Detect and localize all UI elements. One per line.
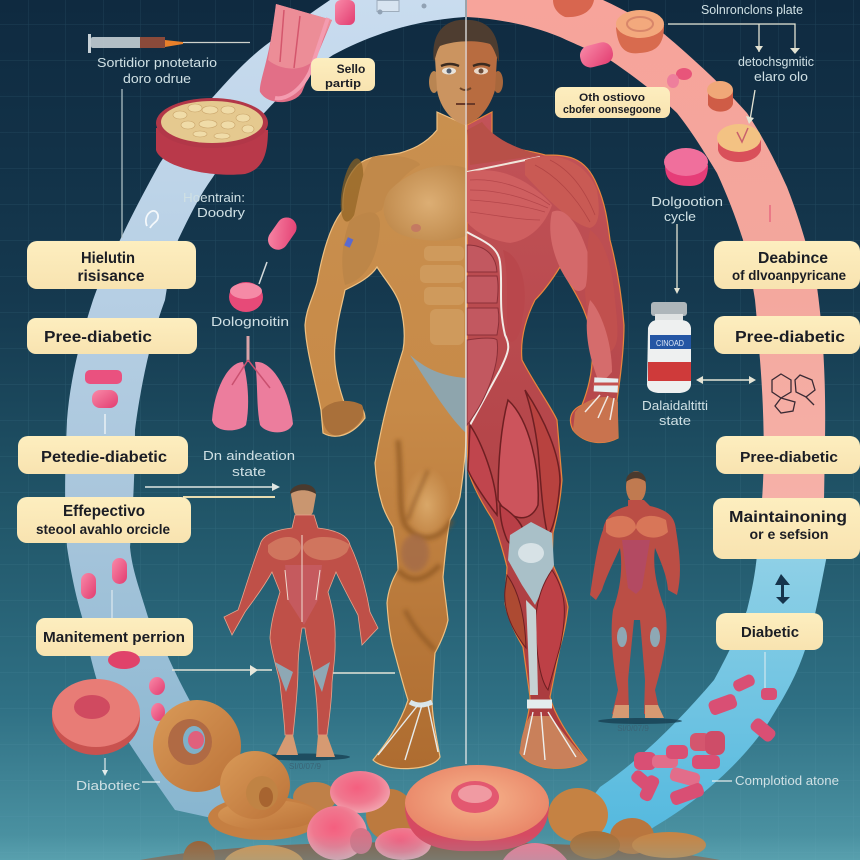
thigh muscles bbox=[468, 390, 560, 547]
text: dish caption bbox=[183, 191, 246, 220]
icon: pink tablet bbox=[229, 282, 263, 312]
label: Oth ostiovo bbox=[555, 87, 670, 118]
text: small figure captions: Sl/0/07/9 bbox=[617, 724, 649, 733]
text: syringe caption: doro odrue bbox=[123, 72, 191, 86]
icon: pink pills lower left bbox=[108, 651, 165, 721]
label: Pre-diabetic right 2 bbox=[716, 436, 860, 474]
hair bbox=[290, 484, 316, 494]
text: Complotiod atone: Complotiod atone bbox=[735, 773, 839, 788]
label: Effepectivo: steool avahlo orcicle bbox=[36, 521, 170, 537]
icon: left donut bbox=[52, 679, 140, 755]
knees bbox=[617, 627, 627, 647]
arrowheads top right bbox=[674, 46, 800, 294]
face right bbox=[465, 20, 497, 125]
biceps bbox=[342, 212, 380, 285]
label: Maintainoning: or e sefsion bbox=[750, 526, 828, 542]
text and arrow: Diabotice: Diabotiec bbox=[76, 778, 141, 793]
foot straps bbox=[410, 702, 432, 705]
ears bbox=[429, 71, 439, 93]
arrow: sky double arrow bbox=[775, 574, 790, 604]
icon: small curl on band bbox=[146, 211, 158, 228]
icon: lungs bbox=[212, 336, 293, 432]
label: Manitement perrion bbox=[36, 618, 193, 656]
label: Deabince: of dlvoanpyricane bbox=[732, 267, 846, 283]
obliques bbox=[503, 250, 525, 342]
text: top right captions bbox=[651, 3, 814, 224]
label: Maintainoning: Maintainoning bbox=[729, 509, 847, 526]
pectoral bbox=[467, 170, 552, 243]
body bbox=[590, 500, 680, 714]
divider: center line bbox=[465, 0, 467, 764]
label: Oth ostiovo: cbofer oonsegoone bbox=[563, 104, 661, 116]
neck muscles bbox=[467, 122, 542, 165]
icon: vial bbox=[647, 302, 691, 393]
labels: left column bbox=[17, 58, 375, 656]
label: Petedie-diabetic bbox=[18, 436, 188, 474]
head bbox=[429, 20, 503, 125]
hair bbox=[433, 20, 499, 62]
label: Oth ostiovo: Oth ostiovo bbox=[579, 92, 645, 104]
chest bbox=[606, 516, 668, 538]
abs bbox=[285, 565, 322, 625]
label: Effepectivo: Effepectivo bbox=[63, 503, 145, 520]
knees bbox=[275, 662, 330, 692]
tendon bbox=[526, 600, 538, 695]
hair bbox=[626, 472, 646, 482]
icon: vial: CINOAD bbox=[656, 339, 684, 348]
pectorals bbox=[268, 537, 350, 560]
eyes bbox=[442, 68, 456, 74]
text: syringe caption: Sortidior pnotetario bbox=[97, 56, 217, 70]
icon: pink capsule bbox=[264, 214, 301, 254]
head bbox=[626, 471, 646, 503]
triceps and forearm bbox=[585, 230, 617, 352]
brown ring 2 bbox=[208, 796, 320, 840]
icon: pink capsules on band bbox=[81, 558, 127, 618]
text: pill caption: Dolognoitin bbox=[211, 315, 289, 329]
knee bbox=[508, 522, 554, 605]
ankle wrap and foot bbox=[527, 700, 552, 708]
thigh and knee shading bbox=[398, 440, 452, 650]
head bbox=[291, 487, 316, 518]
labels: right column bbox=[555, 87, 860, 650]
central donut bbox=[405, 805, 549, 851]
label: Sello bbox=[311, 58, 375, 91]
icon: syringe bbox=[88, 34, 250, 53]
body: skin half bbox=[305, 112, 466, 769]
label: Effepectivo bbox=[17, 497, 191, 543]
brown blobs behind bbox=[293, 782, 337, 812]
text: top right captions: Dolgootion bbox=[651, 195, 723, 209]
pink arc right bbox=[467, 0, 825, 500]
arrow: thin line on sky band bbox=[764, 652, 766, 700]
text and arrow: Diabotice bbox=[76, 758, 160, 793]
body: muscle half bbox=[467, 112, 624, 768]
deltoid bbox=[525, 156, 599, 228]
label: Pre-diabetic left bbox=[27, 318, 197, 354]
icon: blurry grey marks on arc bbox=[377, 0, 426, 14]
panel: small figure left bbox=[224, 484, 378, 760]
label: Deabince bbox=[714, 241, 860, 289]
label: Pre-diabetic right 1 bbox=[714, 316, 860, 354]
text: lungs caption: state bbox=[232, 465, 266, 479]
panel: central figure, skin half bbox=[305, 112, 466, 769]
panel: central figure, muscle half bbox=[467, 112, 624, 768]
abs bbox=[622, 540, 650, 594]
deltoid bbox=[352, 155, 420, 225]
label: Petedie-diabetic: Petedie-diabetic bbox=[41, 449, 167, 466]
label: Pre-diabetic right 2: Pree-diabetic bbox=[740, 449, 838, 466]
face left bbox=[435, 20, 465, 125]
panel: small figure right bbox=[590, 471, 682, 724]
arrow: top right connectors bbox=[668, 24, 795, 290]
pectoral bbox=[384, 165, 466, 241]
label: Diabetic bbox=[716, 613, 823, 650]
biceps bbox=[550, 211, 590, 291]
abs bbox=[420, 246, 464, 345]
arrow: pill arrow bbox=[259, 262, 267, 284]
white fascia bbox=[467, 232, 508, 425]
text: vial caption bbox=[642, 399, 708, 428]
label: Hielutin: risisance bbox=[78, 268, 145, 285]
deltoid hair texture bbox=[337, 157, 367, 223]
arrow: horizontal lower left bbox=[172, 665, 395, 676]
icon: pink pills pair bbox=[85, 370, 122, 408]
icon: molecule bbox=[772, 374, 815, 413]
pink balls bbox=[330, 771, 390, 813]
text: top right captions: cycle bbox=[664, 210, 696, 224]
sky blue arc right bbox=[590, 555, 827, 860]
icon: pill cluster bbox=[629, 673, 777, 806]
icon: top right donuts and pills bbox=[553, 0, 761, 186]
feet bbox=[276, 735, 335, 757]
base mound bbox=[140, 842, 720, 860]
arrow: vertical on band bbox=[104, 414, 106, 434]
icon: pink cup bbox=[260, 0, 355, 102]
label: Sello: Sello bbox=[337, 62, 365, 76]
text: vial caption: state bbox=[659, 414, 691, 428]
abs bbox=[467, 245, 499, 425]
label: Pre-diabetic left: Pree-diabetic bbox=[44, 329, 152, 346]
nose and mouth bbox=[460, 88, 471, 90]
label: Hielutin: Hielutin bbox=[81, 250, 135, 267]
text: small figure captions: SI/0/07/9 bbox=[289, 762, 322, 771]
label: Manitement perrion: Manitement perrion bbox=[43, 629, 185, 646]
ground shadow bbox=[260, 754, 350, 760]
text: top right captions: detochsgmitic bbox=[738, 55, 814, 69]
body bbox=[224, 515, 378, 735]
arrow: small pink down bbox=[769, 205, 771, 222]
text: lungs caption: Dn aindeation bbox=[203, 449, 295, 463]
fog bbox=[0, 835, 860, 860]
shoulder white line bbox=[467, 157, 540, 172]
ground shadow bbox=[598, 718, 682, 724]
thigh highlight bbox=[403, 467, 451, 543]
label: Hielutin bbox=[27, 241, 196, 289]
label: Deabince: Deabince bbox=[758, 250, 828, 267]
text: small figure captions bbox=[289, 724, 649, 771]
text: dish caption: Hoentrain: bbox=[183, 191, 245, 205]
text: dish caption: Doodry bbox=[197, 206, 246, 220]
text: syringe caption bbox=[97, 56, 217, 86]
text: top right captions: elaro olo bbox=[754, 70, 808, 84]
blue arc left bbox=[65, 0, 465, 835]
icon: bottom pile bbox=[0, 700, 860, 860]
label: Sello: partip bbox=[325, 78, 361, 90]
fist bbox=[573, 397, 618, 443]
wrist wrap bbox=[594, 377, 618, 393]
arrow: left double arrow bbox=[145, 483, 280, 497]
label: Maintainoning bbox=[713, 498, 860, 559]
text: lungs caption bbox=[203, 449, 295, 479]
calf bbox=[505, 570, 564, 690]
text: vial caption: Dalaidaltitti bbox=[642, 399, 708, 413]
label: Diabetic: Diabetic bbox=[741, 624, 799, 641]
arrow: vertical line to first label bbox=[121, 89, 123, 238]
brown ring 1 bbox=[153, 700, 241, 792]
arrow: vial double arrow bbox=[696, 376, 756, 384]
text: top right captions: Solnronclons plate bbox=[701, 3, 803, 17]
feet bbox=[612, 705, 664, 718]
knee bbox=[401, 534, 429, 572]
fist bbox=[322, 401, 363, 435]
arm injection mark bbox=[344, 237, 353, 248]
shorts bbox=[410, 355, 466, 433]
label: Pre-diabetic right 1: Pree-diabetic bbox=[735, 329, 845, 346]
icon: dish with grains bbox=[156, 98, 268, 175]
